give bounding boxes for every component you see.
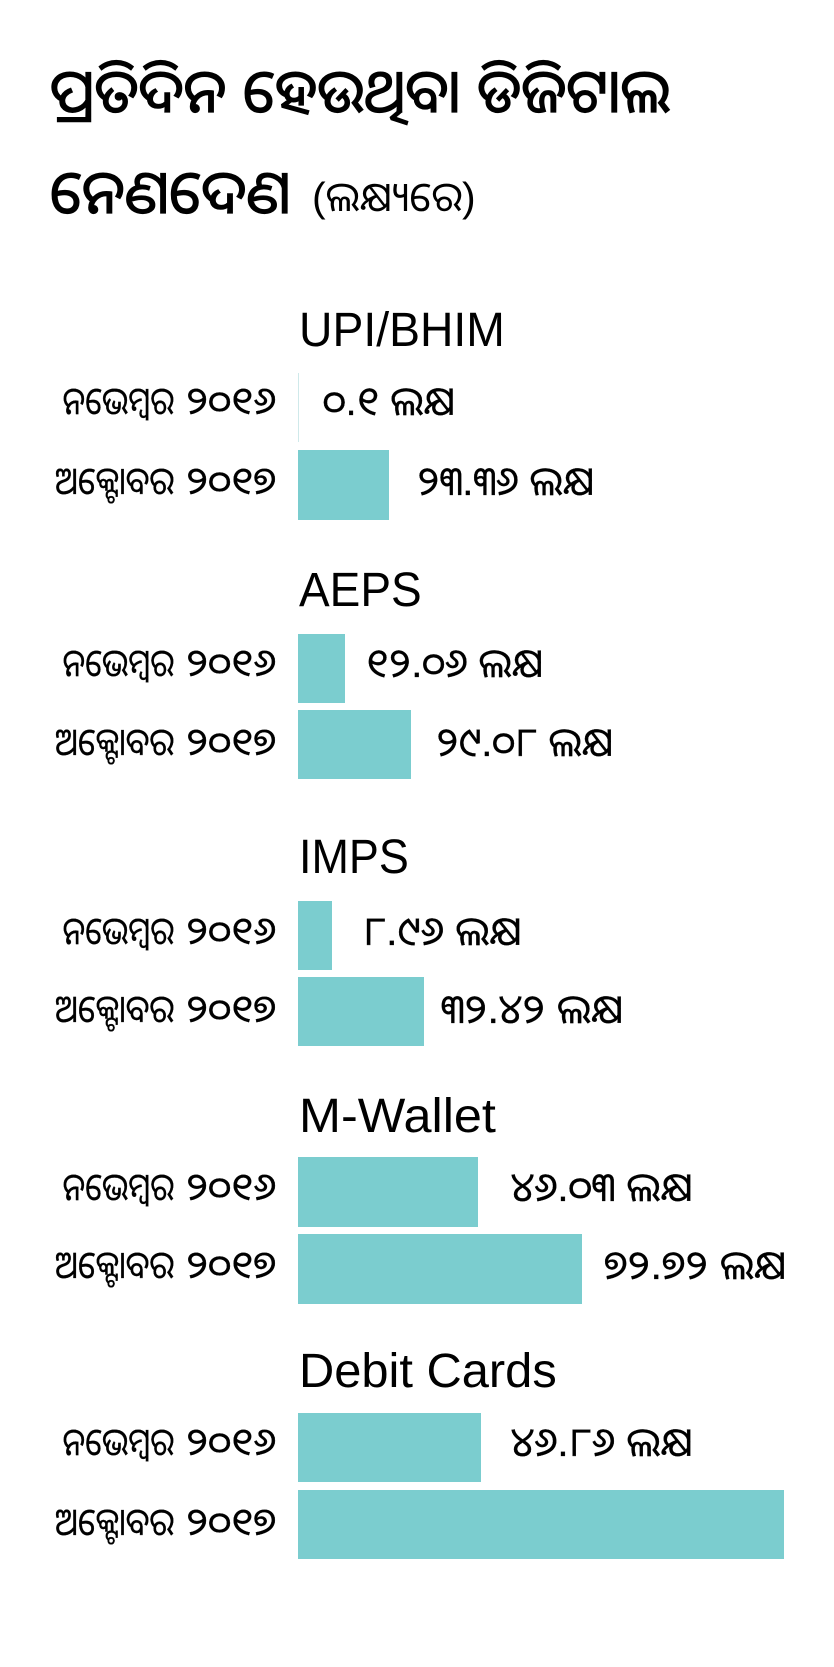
unit note: (ଲକ୍ଷ୍ୟରେ) — [312, 174, 476, 220]
value: October 2017: ୭୨.୭୨ ଲକ୍ଷ — [604, 1244, 786, 1288]
label: November 2016 — [63, 1167, 276, 1209]
label: October 2017: ୨୦୧୭ — [186, 1502, 276, 1544]
label: October 2017: ୨୦୧୭ — [186, 722, 276, 764]
heading: Debit Cards: Debit Cards — [299, 1345, 557, 1398]
panel: IMPS — [55, 831, 623, 1046]
heading: M-Wallet: M-Wallet — [299, 1090, 496, 1143]
label: October 2017: ଅକ୍ଟୋବର — [55, 722, 174, 764]
label: November 2016: ନଭେମ୍ବର — [63, 381, 174, 423]
panel: AEPS — [55, 564, 613, 779]
label: October 2017 — [55, 1245, 276, 1288]
label: November 2016: ୨୦୧୬ — [186, 381, 276, 423]
label: October 2017: ୨୦୧୭ — [186, 989, 276, 1031]
label: November 2016 — [63, 1422, 276, 1464]
heading: IMPS: IMPS — [299, 831, 409, 884]
bar: November 2016 — [298, 901, 332, 970]
value: November 2016: ୪୬.୮୬ ଲକ୍ଷ — [511, 1421, 693, 1465]
value: November 2016: ୪୬.୦୩ ଲକ୍ଷ — [511, 1166, 693, 1210]
bar: November 2016 — [298, 1413, 481, 1482]
value: October 2017: ୨୯.୦୮ ଲକ୍ଷ — [436, 721, 613, 765]
label: November 2016 — [63, 911, 276, 953]
heading: UPI/BHIM: UPI/BHIM — [299, 304, 505, 357]
bar: October 2017 — [298, 1234, 582, 1304]
bar: November 2016 — [298, 1157, 478, 1227]
label: November 2016: ନଭେମ୍ବର — [63, 911, 174, 953]
bar: November 2016 — [298, 634, 345, 703]
label: October 2017: ୨୦୧୭ — [186, 1245, 276, 1287]
value: November 2016: ୮.୯୬ ଲକ୍ଷ — [363, 910, 522, 954]
bar: October 2017 — [298, 450, 389, 520]
panel: UPI/BHIM — [55, 304, 594, 520]
label: October 2017 — [55, 461, 276, 504]
label: November 2016: ନଭେମ୍ବର — [63, 643, 174, 685]
panel: Debit Cards — [55, 1345, 784, 1559]
label: October 2017: ଅକ୍ଟୋବର — [55, 1245, 174, 1287]
title line 1: ପ୍ରତିଦିନ ହେଉଥିବା ଡିଜିଟାଲ — [50, 58, 670, 125]
label: November 2016 — [63, 381, 276, 423]
value: October 2017: ୨୩.୩୬ ଲକ୍ଷ — [417, 460, 594, 504]
label: November 2016: ନଭେମ୍ବର — [63, 1422, 174, 1464]
label: October 2017 — [55, 1502, 276, 1545]
label: October 2017: ଅକ୍ଟୋବର — [55, 989, 174, 1031]
label: October 2017 — [55, 989, 276, 1032]
label: October 2017: ୨୦୧୭ — [186, 461, 276, 503]
panel: M-Wallet — [55, 1090, 786, 1304]
bar: October 2017 — [298, 977, 424, 1046]
bar: October 2017 — [298, 710, 411, 779]
label: November 2016: ୨୦୧୬ — [186, 911, 276, 953]
label: November 2016 — [63, 643, 276, 685]
heading: AEPS: AEPS — [299, 564, 422, 617]
bar: November 2016 — [298, 373, 299, 442]
label: November 2016: ୨୦୧୬ — [186, 1167, 276, 1209]
value: November 2016: ୦.୧ ଲକ୍ଷ — [323, 380, 455, 424]
label: November 2016: ନଭେମ୍ବର — [63, 1167, 174, 1209]
value: October 2017: ୩୨.୪୨ ଲକ୍ଷ — [441, 988, 623, 1032]
bar: October 2017 — [298, 1490, 784, 1559]
title line 2: ନେଣଦେଣ — [50, 159, 291, 226]
label: October 2017: ଅକ୍ଟୋବର — [55, 1502, 174, 1544]
title — [50, 58, 670, 226]
label: October 2017: ଅକ୍ଟୋବର — [55, 461, 174, 503]
value: November 2016: ୧୨.୦୬ ଲକ୍ଷ — [366, 642, 543, 686]
label: November 2016: ୨୦୧୬ — [186, 1422, 276, 1464]
label: October 2017 — [55, 722, 276, 765]
label: November 2016: ୨୦୧୬ — [186, 643, 276, 685]
